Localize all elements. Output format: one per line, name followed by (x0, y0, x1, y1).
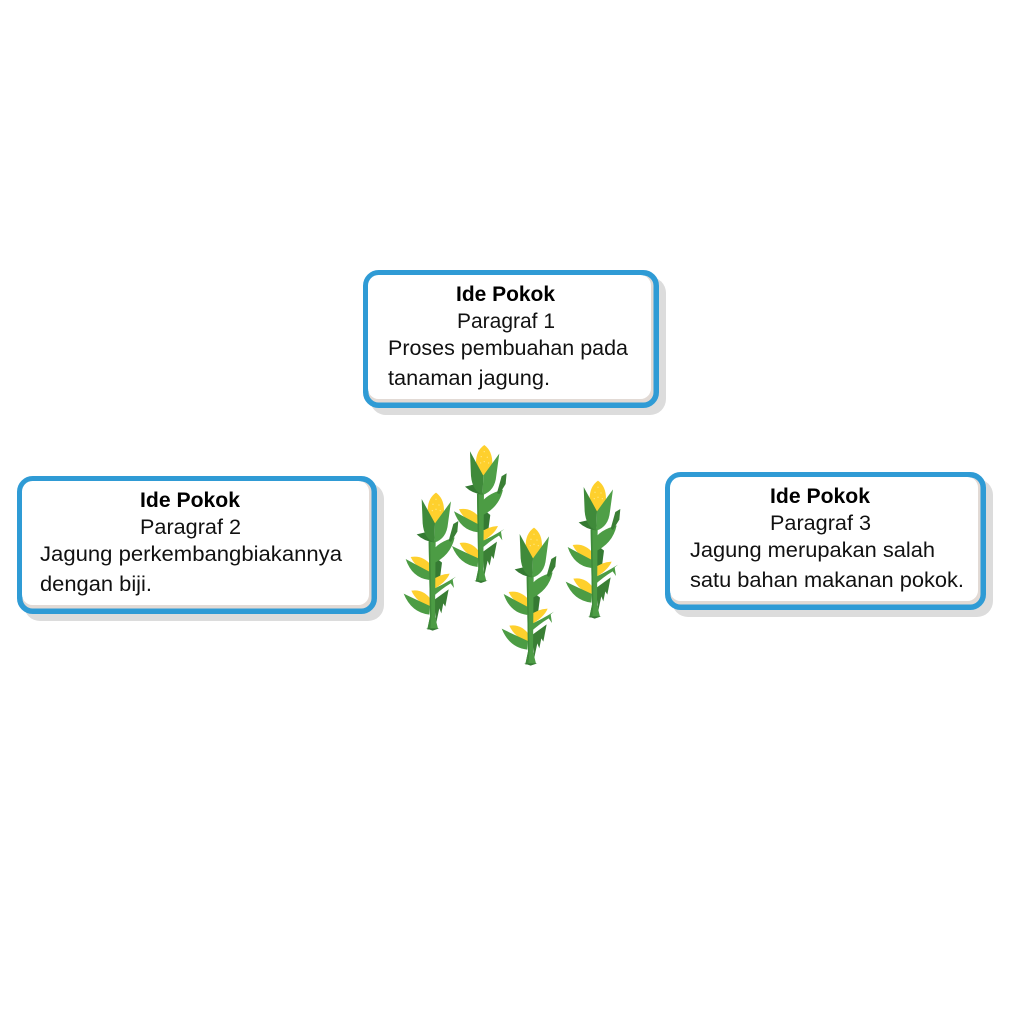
text block: main idea 2: dengan biji. (40, 572, 152, 596)
card frame 3 (668, 475, 993, 617)
text block: main idea 3 (690, 538, 964, 592)
heading: Ide Pokok: Ide Pokok (456, 282, 555, 306)
heading: Ide Pokok: Ide Pokok (140, 488, 240, 512)
subheading: Paragraf 1: Paragraf 1 (457, 309, 555, 333)
card frame 2 (20, 479, 384, 621)
illustration: corn plants (404, 445, 620, 666)
panel: Paragraf 2 (20, 479, 384, 621)
subheading: Paragraf 3: Paragraf 3 (770, 511, 871, 535)
text block: main idea 3: satu bahan makanan pokok. (690, 568, 964, 592)
text block: main idea 3: Jagung merupakan salah (690, 538, 935, 562)
text block: main idea 1: Proses pembuahan pada (388, 336, 628, 360)
icon: corn plant 3 (502, 528, 556, 666)
icon: corn plant 2 (452, 445, 507, 583)
text block: main idea 1 (388, 336, 628, 390)
icon: corn plant 1 (404, 493, 458, 631)
panel: Paragraf 3 (668, 475, 993, 617)
subheading: Paragraf 2: Paragraf 2 (140, 515, 241, 539)
icon: corn plant 4 (566, 481, 620, 619)
card frame 1 (366, 273, 666, 415)
text block: main idea 2 (40, 542, 342, 596)
heading: Ide Pokok: Ide Pokok (770, 484, 870, 508)
panel: Paragraf 1 (366, 273, 666, 415)
text block: main idea 2: Jagung perkembangbiakannya (40, 542, 342, 566)
text block: main idea 1: tanaman jagung. (388, 366, 550, 390)
